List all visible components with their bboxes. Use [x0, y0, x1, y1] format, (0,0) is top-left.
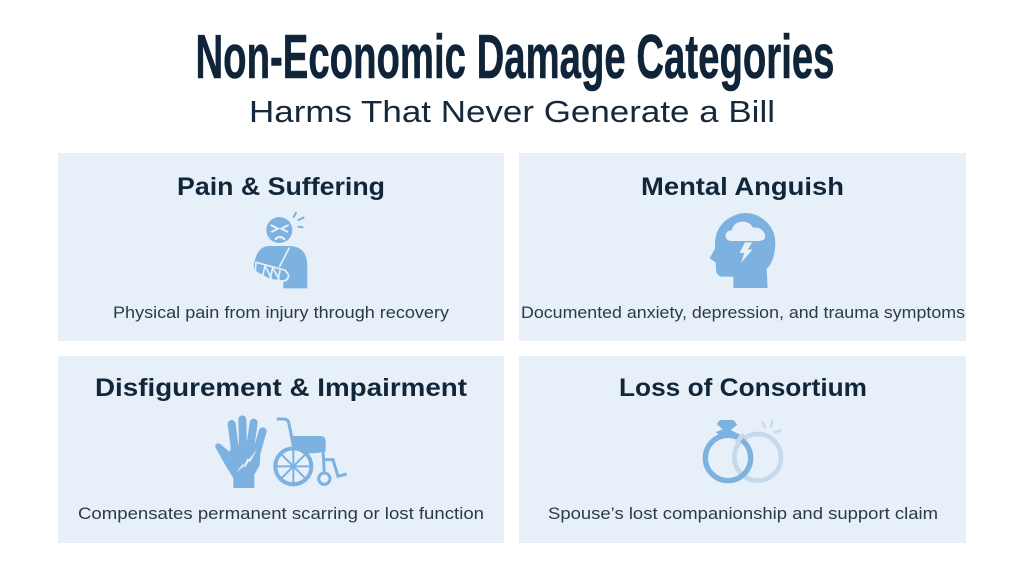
subtitle: Harms That Never Generate a Bill — [249, 94, 775, 129]
icon: injured person with arm sling — [254, 212, 307, 288]
heading: loss of consortium: Loss of Consortium — [619, 374, 867, 402]
icon: wheelchair — [275, 419, 347, 484]
icon: scarred hand — [215, 419, 263, 488]
description: loss of consortium: Spouse’s lost companionship and support claim — [548, 505, 938, 523]
icon: wedding rings — [705, 420, 781, 481]
panel: mental anguish — [519, 153, 966, 341]
description: pain and suffering: Physical pain from injury through recovery — [113, 304, 450, 322]
heading: mental anguish: Mental Anguish — [641, 173, 844, 201]
heading: pain and suffering: Pain & Suffering — [177, 173, 385, 201]
panel: pain and suffering — [58, 153, 504, 341]
icon: head with storm cloud — [710, 213, 775, 288]
description: mental anguish: Documented anxiety, depression, and trauma symptoms — [521, 304, 965, 322]
heading: disfigurement and impairment: Disfigurement & Impairment — [95, 374, 468, 402]
panel: loss of consortium — [519, 356, 966, 543]
panel: disfigurement and impairment — [58, 356, 504, 543]
description: disfigurement and impairment: Compensates permanent scarring or lost function — [78, 505, 484, 523]
